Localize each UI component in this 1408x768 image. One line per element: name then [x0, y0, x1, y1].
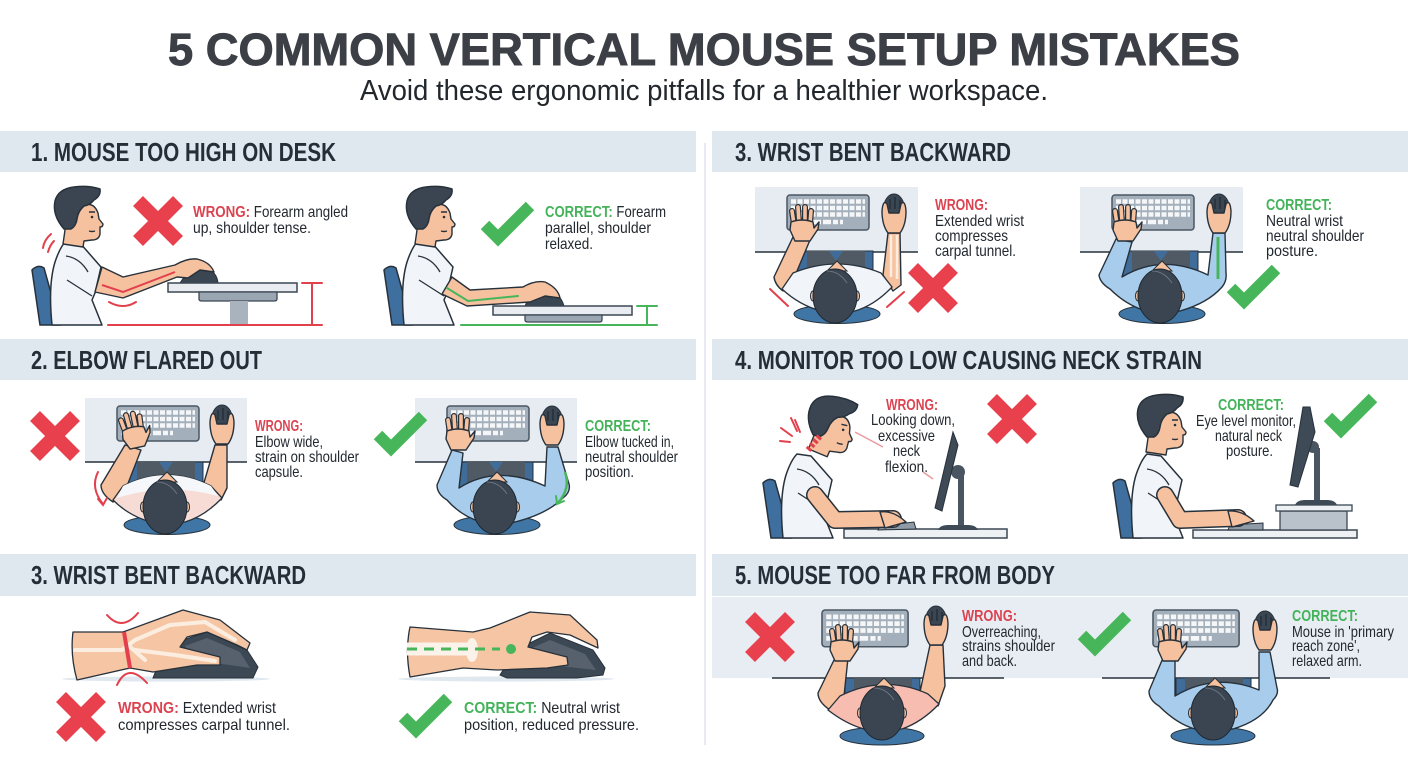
text: wrong	[118, 700, 290, 734]
heading: elbow flared	[0, 339, 696, 380]
icon: red X	[913, 268, 953, 308]
icon: green check	[403, 698, 448, 730]
icon: red X	[61, 697, 101, 737]
illustration: correct, top view with neutral arm	[1080, 187, 1243, 324]
text: wrong: neck	[893, 443, 921, 460]
text: correct: Elbow tucked in,	[585, 434, 674, 451]
text: wrong: flexion.	[885, 459, 928, 476]
text: correct: Eye level monitor,	[1196, 413, 1296, 430]
title: 5 COMMON VERTICAL MOUSE SETUP MISTAKES	[168, 24, 1240, 75]
text: correct	[1292, 608, 1394, 670]
icon: red X	[750, 617, 790, 657]
text: wrong: excessive	[878, 428, 935, 445]
illustration: wrong, leaning to low monitor	[763, 391, 1007, 538]
heading: mouse too high: 1. MOUSE TOO HIGH ON DESK	[31, 137, 336, 167]
icon: green check	[378, 416, 423, 448]
text: correct	[1266, 197, 1365, 260]
text: correct	[1196, 397, 1296, 460]
heading: elbow flared: 2. ELBOW FLARED OUT	[31, 345, 262, 375]
text: wrong: WRONG: Forearm angled	[193, 204, 348, 221]
icon: green check	[1082, 616, 1127, 648]
text: correct: neutral shoulder	[1266, 228, 1365, 245]
icon: green check	[1328, 398, 1373, 430]
icon: red X	[138, 201, 178, 241]
icon: green check	[1231, 269, 1276, 301]
illustration: correct, mouse in primary reach zone	[1102, 610, 1330, 745]
text: wrong: capsule.	[255, 464, 303, 481]
text: correct: posture.	[1226, 443, 1273, 460]
text: correct: position.	[585, 464, 634, 481]
text: correct	[464, 700, 639, 734]
text: correct: CORRECT:	[585, 418, 651, 435]
text: wrong: strain on shoulder	[255, 449, 360, 466]
heading: wrist bent: 3. WRIST BENT BACKWARD	[735, 137, 1011, 167]
text: wrong	[935, 197, 1024, 260]
text: correct: relaxed arm.	[1292, 653, 1362, 670]
text: correct: Neutral wrist	[1266, 213, 1343, 230]
panel: 4 monitor too low	[712, 339, 1408, 538]
text: wrong: Looking down,	[871, 412, 955, 429]
illustration: wrong, arm raised to high desk	[32, 186, 322, 325]
text: wrong: WRONG:	[962, 608, 1017, 625]
text: correct: reach zone',	[1292, 638, 1360, 655]
text: wrong: carpal tunnel.	[935, 243, 1016, 260]
text: correct: CORRECT: Forearm	[545, 204, 666, 221]
text: wrong: compresses	[935, 228, 1008, 245]
text: wrong: WRONG:	[255, 418, 303, 435]
text: wrong: and back.	[962, 653, 1017, 670]
heading: wrist bent	[712, 131, 1408, 172]
icon: red X	[992, 399, 1032, 439]
icon: red X	[35, 416, 75, 456]
text: correct: neutral shoulder	[585, 449, 679, 466]
text: wrong	[962, 608, 1056, 670]
desk band	[712, 597, 1408, 678]
icon: green check	[485, 206, 530, 238]
heading: mouse too high	[0, 131, 696, 172]
text: correct: position, reduced pressure.	[464, 717, 639, 734]
heading: mouse too far	[712, 554, 1408, 596]
text: wrong: up, shoulder tense.	[193, 220, 311, 237]
panel: 3 wrist bent backward, top view	[712, 131, 1408, 324]
text: correct: CORRECT:	[1218, 397, 1284, 414]
text: wrong: Overreaching,	[962, 624, 1041, 641]
illustration: wrong, elbow wide	[85, 398, 247, 534]
text: wrong: WRONG: Extended wrist	[118, 700, 276, 717]
text: wrong: Elbow wide,	[255, 434, 323, 451]
panel: 2 elbow flared out	[0, 339, 696, 534]
illustration: wrong, top view with x-ray arm	[755, 187, 918, 324]
text: wrong	[255, 418, 360, 481]
heading: monitor too low: 4. MONITOR TOO LOW CAUSING NECK STRAIN	[735, 345, 1202, 375]
text: correct: CORRECT:	[1292, 608, 1358, 625]
text: wrong: Extended wrist	[935, 213, 1024, 230]
heading: wrist bent: 3. WRIST BENT BACKWARD	[31, 560, 306, 590]
illustration: wrong, overreaching	[772, 606, 1004, 745]
text: correct: natural neck	[1215, 428, 1283, 445]
text: wrong: WRONG:	[935, 197, 988, 214]
text: wrong	[193, 204, 348, 237]
text: correct	[585, 418, 679, 481]
heading: monitor too low	[712, 339, 1408, 380]
text: correct: posture.	[1266, 243, 1318, 260]
illustration: correct, neutral wrist	[398, 612, 614, 682]
text: correct	[545, 204, 666, 253]
text: correct: CORRECT:	[1266, 197, 1332, 214]
heading: mouse too far: 5. MOUSE TOO FAR FROM BODY	[735, 560, 1055, 590]
illustration: correct, forearm parallel	[384, 186, 657, 325]
text: wrong: strains shoulder	[962, 638, 1056, 655]
text: correct: relaxed.	[545, 236, 593, 253]
subtitle: Avoid these ergonomic pitfalls for a healthier workspace.	[360, 75, 1048, 107]
text: correct: parallel, shoulder	[545, 220, 652, 237]
panel: 5 mouse too far from body	[712, 554, 1408, 745]
illustration: correct, monitor at eye level	[1113, 394, 1357, 538]
panel: 1 mouse too high on desk	[0, 131, 696, 325]
illustration: correct, elbow tucked	[415, 398, 577, 534]
text: wrong	[871, 397, 955, 476]
text: wrong: compresses carpal tunnel.	[118, 717, 290, 734]
text: wrong: WRONG:	[886, 397, 938, 414]
text: correct: CORRECT: Neutral wrist	[464, 700, 620, 717]
illustration: wrong, hand skeleton on mouse	[62, 610, 270, 685]
heading: wrist bent	[0, 554, 696, 596]
panel: 3 wrist bent backward, side view	[0, 554, 696, 737]
